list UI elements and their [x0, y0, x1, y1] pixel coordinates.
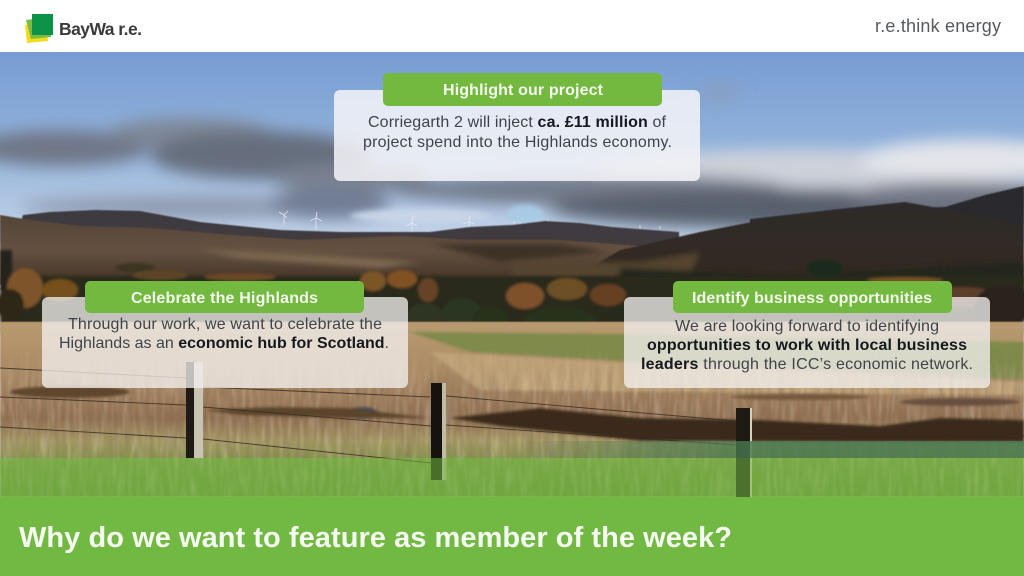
near hill left [0, 215, 660, 285]
fence post 3 [736, 408, 752, 497]
card background [42, 297, 408, 388]
near hill right [600, 201, 1024, 292]
fence post 1 [186, 362, 203, 458]
landscape photo [0, 52, 1024, 497]
card text [59, 316, 389, 352]
logo: BayWa r.e.: BayWa r.e. [59, 19, 142, 39]
card heading [673, 281, 952, 313]
tagline: r.e.think energy [875, 16, 1001, 36]
card heading [383, 73, 662, 106]
distant peak right [749, 186, 1024, 227]
card background [334, 90, 700, 181]
header bar [0, 0, 1024, 52]
green overlay strip [512, 441, 1024, 458]
green overlay on grass [0, 458, 1024, 497]
card heading: Celebrate the Highlands [131, 290, 318, 307]
heather shadow band [10, 386, 1024, 442]
panel: highlight our project [334, 73, 700, 181]
card heading: Highlight our project [443, 82, 604, 99]
card text: opportunities to work with local business [647, 337, 967, 354]
panel: celebrate the Highlands [42, 281, 408, 388]
card text [641, 318, 973, 373]
field and grass [0, 322, 1024, 497]
fence wires [0, 368, 1024, 463]
card text: We are looking forward to identifying [675, 318, 939, 335]
sky [0, 52, 1024, 242]
footer heading: Why do we want to feature as member of the week? [19, 522, 732, 554]
footer band [0, 497, 1024, 576]
card heading: Identify business opportunities [692, 290, 932, 307]
card text: Through our work, we want to celebrate the [68, 316, 382, 333]
far hills [0, 210, 680, 290]
card text [363, 114, 672, 151]
hills, trees and field [0, 186, 1024, 497]
wind turbines [279, 211, 660, 234]
logo: BayWa r.e. [25, 14, 142, 43]
fence post 2 [431, 383, 446, 480]
card background [624, 297, 990, 388]
tree band [0, 250, 1024, 334]
card text: Corriegarth 2 will inject ca. £11 million of [368, 114, 667, 131]
card text: leaders through the ICC’s economic network. [641, 356, 973, 373]
card text: Highlands as an economic hub for Scotland. [59, 335, 389, 352]
panel: identify business opportunities [624, 281, 990, 388]
clouds [0, 86, 1024, 228]
card heading [85, 281, 364, 313]
card text: project spend into the Highlands economy. [363, 134, 672, 151]
